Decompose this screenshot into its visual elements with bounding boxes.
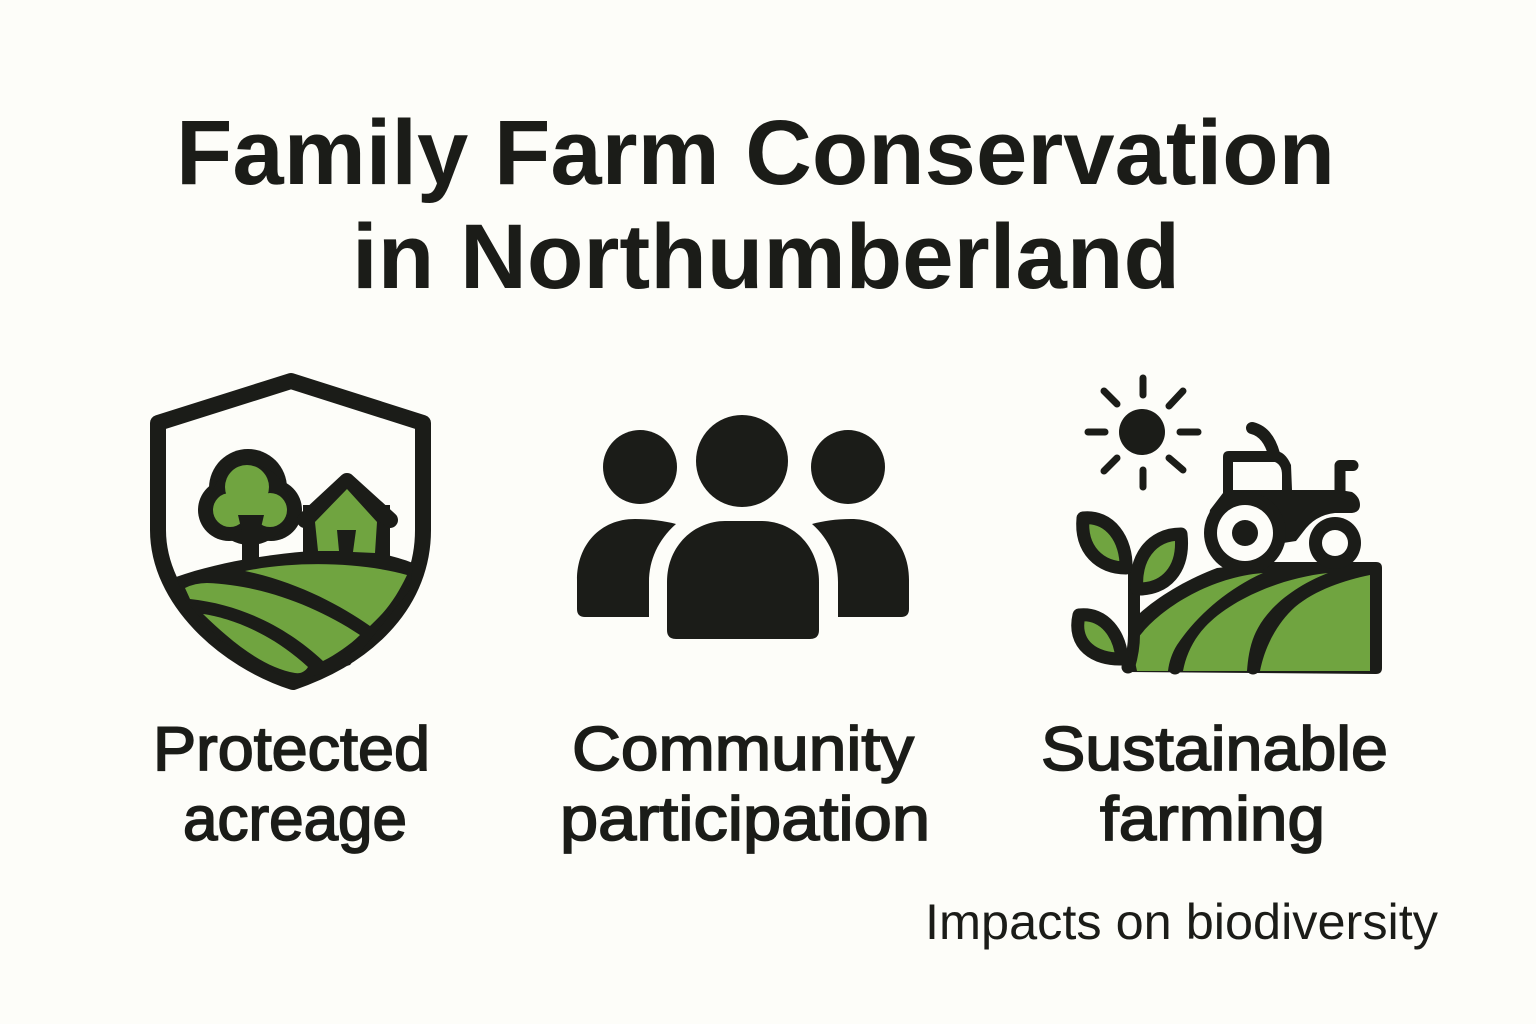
icon: community group of three people <box>577 415 909 639</box>
label: community participation: Community <box>572 715 914 784</box>
icon: sun, tractor, plant and field <box>1078 378 1382 674</box>
title: Family Farm Conservation <box>176 102 1335 204</box>
label: protected acreage <box>153 715 430 854</box>
label: protected acreage: Protected <box>153 715 430 784</box>
left person <box>603 430 677 504</box>
hill base <box>176 550 413 682</box>
tractor <box>1204 428 1361 574</box>
shield outline <box>158 381 423 682</box>
tree <box>198 449 302 562</box>
sun <box>1088 378 1198 487</box>
label: protected acreage: acreage <box>183 785 407 854</box>
label: sustainable farming <box>1041 715 1388 854</box>
title: in Northumberland <box>352 206 1180 308</box>
note: impacts on biodiversity: Impacts on biodiversity <box>925 894 1438 950</box>
house <box>303 481 390 556</box>
centre person <box>696 415 788 507</box>
plant <box>1078 518 1182 667</box>
label: sustainable farming: Sustainable <box>1041 715 1388 784</box>
right person <box>811 430 885 504</box>
label: community participation <box>560 715 930 854</box>
fields <box>245 564 407 626</box>
hill <box>1122 562 1382 674</box>
label: community participation: participation <box>560 785 930 854</box>
title <box>176 102 1335 308</box>
label: sustainable farming: farming <box>1100 785 1325 854</box>
icon: shield with tree, house and fields <box>158 381 423 682</box>
